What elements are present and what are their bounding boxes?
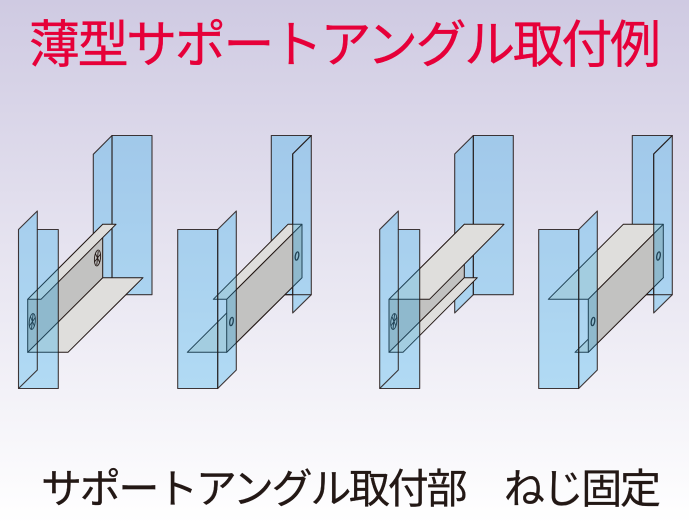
front post face [178,230,218,388]
web [588,224,663,352]
web [389,224,464,352]
front post [380,211,420,388]
back post side [93,136,112,313]
screw far [656,252,661,260]
upper flange [548,224,663,299]
back post side [455,136,473,313]
upper flange [389,224,504,299]
web [227,224,302,352]
upper flange [213,224,302,299]
title: 薄型サポートアングル取付例 [29,16,661,74]
back post face [632,136,672,295]
diagram 1: support angle mounted, outward flanges [18,136,152,388]
front post side [218,211,236,388]
front post [18,211,58,388]
upper flange [28,224,116,299]
lower flange [187,278,302,352]
back post side [293,136,311,313]
screw near [390,313,398,330]
web [28,224,103,352]
back post face [473,136,513,295]
lower flange [575,278,663,352]
back post face [271,136,311,295]
back post bottom edge [285,294,311,296]
back post bottom edge [646,294,672,296]
screw near [229,317,234,326]
back post face [112,136,152,295]
screw near [28,313,36,330]
diagram 2: support angle mounted, inward flanges [178,136,311,388]
front post fold lines [18,230,37,388]
screw far [295,252,299,260]
front post fold lines [380,230,398,388]
screw far [94,250,101,266]
front post face [539,230,579,388]
screw near [591,317,595,326]
bottom caption: サポートアングル取付部 ねじ固定 [41,466,661,512]
diagram 4: screw fixing, inward flanges [539,136,672,388]
front post side [579,211,597,388]
back post side [654,136,672,313]
lower flange [28,278,143,352]
diagram 3: screw fixing, outward flanges [380,136,513,388]
lower flange [389,278,477,352]
